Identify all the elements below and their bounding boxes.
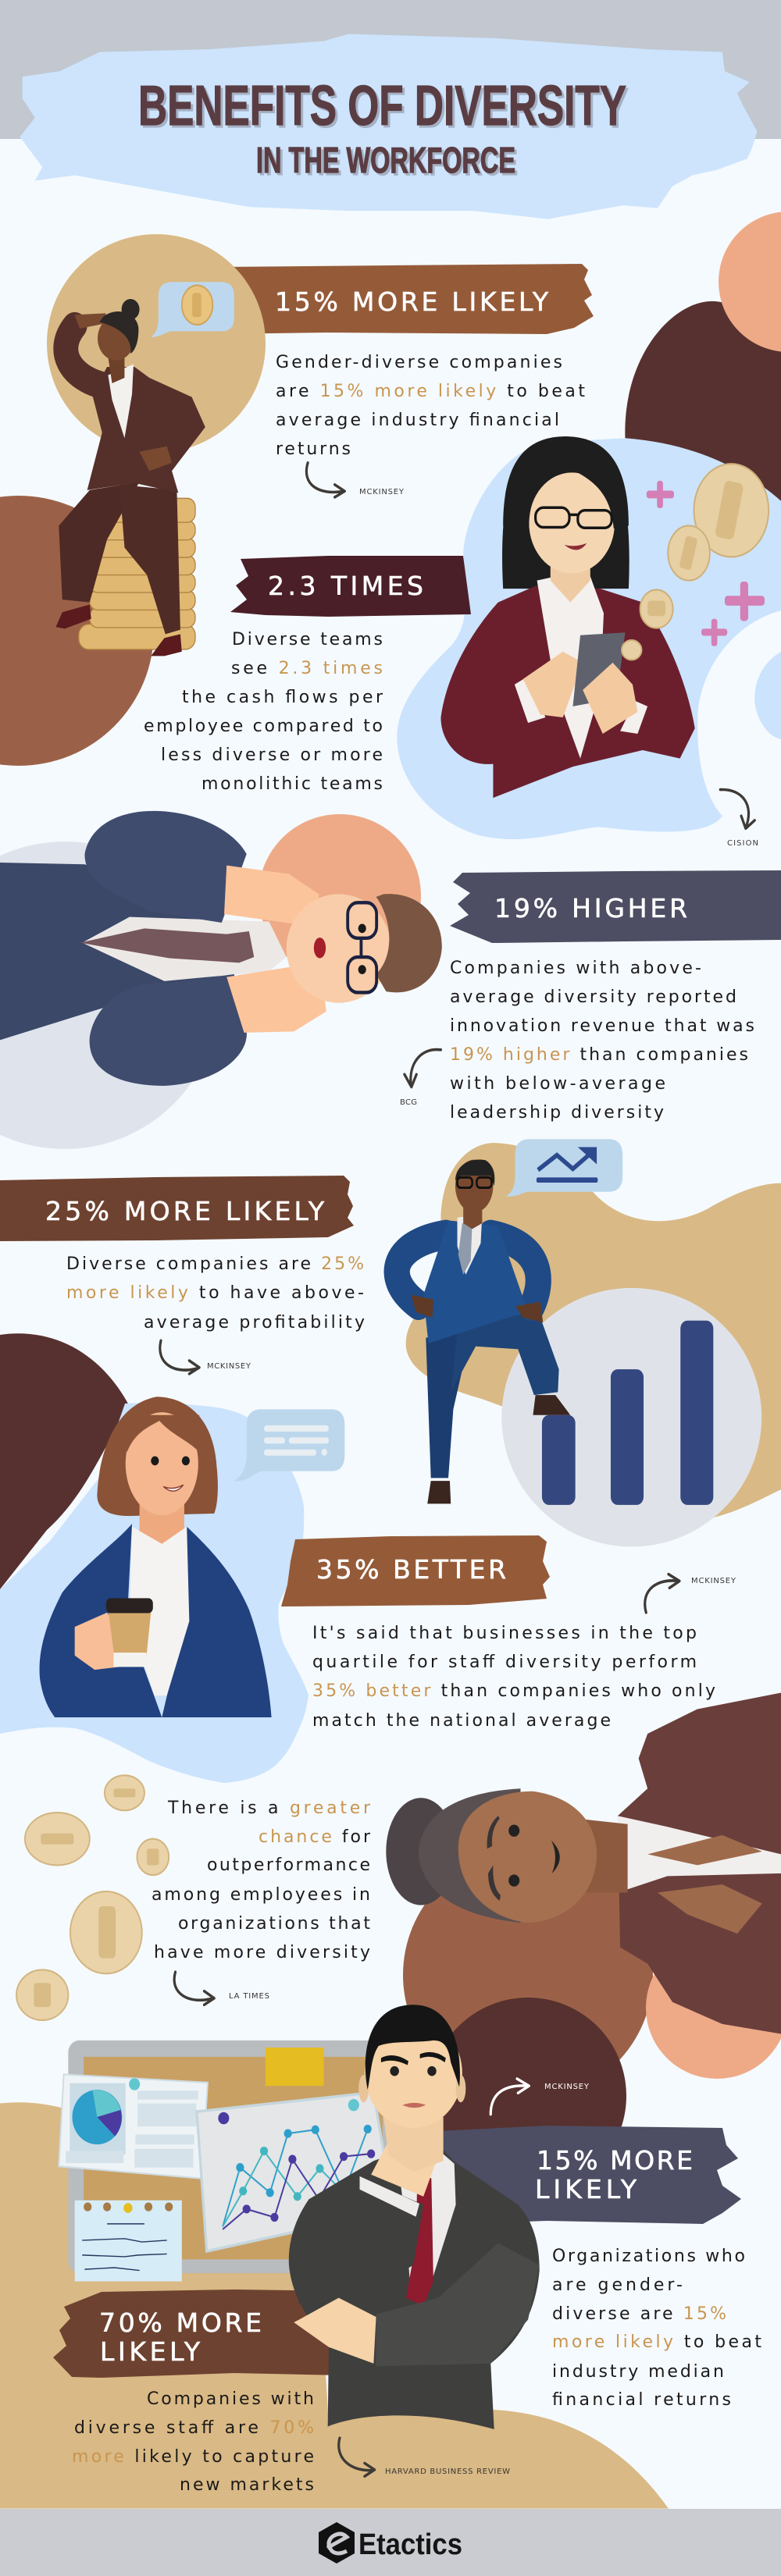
body text: 35% better: It's said that businesses in the top bbox=[312, 1624, 697, 1643]
body text: organizations who: are gender- bbox=[552, 2275, 683, 2295]
title banner bbox=[20, 34, 757, 219]
heading bar: 2.3 times bbox=[230, 556, 471, 617]
source: LA Times bbox=[174, 1972, 269, 2005]
body text: greater chance: organizations that bbox=[178, 1914, 370, 1934]
body text: greater chance: among employees in bbox=[152, 1885, 370, 1905]
body text: greater chance bbox=[152, 1799, 371, 1962]
body text: 70% more likely bbox=[72, 2389, 314, 2495]
source: McKinsey 2: MCKINSEY bbox=[207, 1362, 251, 1371]
source: McKinsey 3: MCKINSEY bbox=[691, 1577, 736, 1585]
source: McKinsey 4 bbox=[490, 2079, 590, 2115]
jacket bbox=[40, 1524, 272, 1717]
body text: 35% better: match the national average bbox=[312, 1711, 611, 1731]
hair bbox=[97, 1397, 218, 1516]
body text: 19% higher: innovation revenue that was bbox=[450, 1016, 754, 1036]
line chart card bbox=[129, 2078, 394, 2251]
hair bun bbox=[386, 1798, 456, 1905]
body text: 35% better bbox=[312, 1624, 715, 1731]
logo mark bbox=[319, 2522, 355, 2564]
body text: 15% more likely: are 15% more likely to beat bbox=[276, 382, 585, 401]
source arrow: Cision bbox=[720, 789, 754, 828]
hair bbox=[419, 1788, 521, 1923]
body text: 19% higher: Companies with above- bbox=[450, 959, 701, 978]
heading bar: 25% more likely: 25% MORE LIKELY bbox=[45, 1196, 325, 1226]
body text: greater chance: There is a greater bbox=[167, 1799, 371, 1818]
body text: 70% more likely: Companies with bbox=[147, 2389, 314, 2409]
trousers and shoes bbox=[55, 482, 182, 656]
body text: organizations who: diverse are 15% bbox=[552, 2304, 726, 2324]
body text: 70% more likely: new markets bbox=[180, 2475, 314, 2495]
source: McKinsey 1: MCKINSEY bbox=[359, 488, 405, 496]
body text: 15% more likely: Gender-diverse companies bbox=[276, 353, 562, 372]
frame bbox=[68, 2041, 390, 2273]
body text: 70% more likely: diverse staff are 70% bbox=[74, 2418, 314, 2438]
subtitle text: IN THE WORKFORCE bbox=[256, 140, 515, 180]
heading bar: 70% more likely bbox=[53, 2290, 344, 2378]
source: Cision: CISION bbox=[727, 839, 758, 848]
body text: organizations who: financial returns bbox=[552, 2390, 731, 2410]
heading bar: 70% more likely: LIKELY bbox=[100, 2336, 201, 2367]
source: McKinsey 1 bbox=[306, 463, 405, 497]
panel: left blobs behind woman bbox=[0, 1333, 308, 1783]
shirt bbox=[398, 2150, 456, 2298]
body text: organizations who bbox=[552, 2247, 761, 2410]
hair bbox=[502, 436, 629, 589]
body text: 19% higher: 19% higher than companies bbox=[450, 1045, 748, 1065]
body text: 2.3 times: less diverse or more bbox=[161, 745, 383, 765]
body text: 19% higher bbox=[450, 959, 754, 1123]
heading bar: 35% better: 35% BETTER bbox=[316, 1554, 506, 1585]
hands bbox=[647, 1835, 762, 1934]
illustration: woman lying sideways bbox=[386, 1692, 781, 2033]
body text: 25% more likely bbox=[66, 1254, 365, 1332]
body text: 25% more likely: average profitability bbox=[144, 1313, 365, 1332]
body text: 2.3 times bbox=[144, 630, 383, 794]
arms bbox=[397, 1235, 538, 1306]
source: Harvard Business Review: HARVARD BUSINESS REVIEW bbox=[385, 2467, 510, 2476]
jacket bbox=[618, 1692, 781, 2033]
footer bbox=[0, 2509, 781, 2576]
body text: 19% higher: average diversity reported bbox=[450, 987, 736, 1007]
coins bbox=[622, 464, 769, 660]
panel: right circles bbox=[403, 1850, 781, 2194]
body text: 15% more likely: returns bbox=[276, 439, 351, 459]
body text: greater chance: have more diversity bbox=[154, 1943, 370, 1962]
illustration: thinking man bbox=[289, 2005, 540, 2429]
body text: 25% more likely: more likely to have above- bbox=[66, 1283, 364, 1303]
illustration: woman with coffee cup bbox=[40, 1397, 344, 1717]
illustration: surprised man lying sideways bbox=[0, 811, 442, 1086]
body text: greater chance: chance for bbox=[259, 1827, 371, 1847]
grey circle bbox=[501, 1288, 761, 1546]
body text: 70% more likely: more likely to capture bbox=[72, 2447, 314, 2467]
heading bar: 19% higher bbox=[450, 870, 781, 943]
sleeves bbox=[84, 811, 247, 1086]
bar chart bbox=[542, 1321, 713, 1505]
coin stack bbox=[79, 498, 195, 649]
heading bar: 25% more likely bbox=[0, 1176, 354, 1241]
body text: organizations who: Organizations who bbox=[552, 2247, 745, 2266]
heading bar: 15% more likely (second): 15% MORE bbox=[537, 2145, 693, 2176]
crossed arm and hand bbox=[294, 2243, 540, 2366]
speech bubble with coin bbox=[151, 282, 234, 337]
tan circle behind woman bbox=[47, 234, 266, 453]
body text: 15% more likely bbox=[276, 353, 585, 459]
illustration: woman with phone and coins bbox=[440, 436, 769, 828]
panel: bottom tan shape bbox=[0, 2102, 669, 2509]
heading bar: 19% higher: 19% HIGHER bbox=[494, 893, 687, 923]
jacket bbox=[440, 586, 695, 798]
panel: growth chart background bbox=[406, 1143, 781, 1546]
speech bubble with chart bbox=[505, 1139, 622, 1197]
phone and hands bbox=[515, 632, 647, 734]
shirt bbox=[618, 1816, 781, 1892]
illustration: woman on coin stack bbox=[55, 282, 234, 656]
torso bbox=[423, 1220, 528, 1343]
body bbox=[289, 2144, 540, 2429]
illustration: man with foot on bar chart bbox=[397, 1139, 622, 1503]
body text: 35% better: 35% better than companies who only bbox=[312, 1681, 715, 1701]
heading bar: 70% more likely: 70% MORE bbox=[99, 2307, 262, 2338]
cork bbox=[84, 2057, 383, 2259]
source: McKinsey 3 bbox=[645, 1574, 736, 1613]
source: McKinsey 2 bbox=[160, 1340, 251, 1374]
brush background bbox=[20, 34, 757, 219]
source: BCG: BCG bbox=[400, 1098, 417, 1107]
plus signs bbox=[647, 481, 765, 646]
shirt bbox=[130, 1527, 189, 1695]
body text: 15% more likely: average industry financial bbox=[276, 411, 559, 430]
neck and face bbox=[124, 1412, 199, 1558]
source: BCG bbox=[400, 1050, 440, 1107]
body text: 2.3 times: the cash flows per bbox=[182, 688, 383, 707]
source: McKinsey 4: MCKINSEY bbox=[544, 2083, 590, 2091]
body text: 35% better: quartile for staff diversity perform bbox=[312, 1653, 697, 1672]
heading bar: 35% better bbox=[281, 1535, 550, 1606]
body text: 19% higher: leadership diversity bbox=[450, 1103, 664, 1123]
bulletin board illustration bbox=[59, 2041, 394, 2282]
legs bbox=[426, 1311, 570, 1503]
body text: 2.3 times: see 2.3 times bbox=[231, 659, 383, 678]
body text: 2.3 times: monolithic teams bbox=[201, 774, 383, 794]
tie bbox=[406, 2172, 433, 2306]
body text: 2.3 times: employee compared to bbox=[144, 717, 383, 736]
source: Harvard Business Review bbox=[339, 2438, 510, 2476]
jacket and arm bbox=[66, 313, 205, 493]
heading bar: 15% more likely (second) bbox=[437, 2126, 741, 2225]
hand and coffee cup bbox=[75, 1598, 153, 1670]
heading bar: 15% more likely (second): LIKELY bbox=[535, 2174, 637, 2204]
blouse bbox=[537, 570, 604, 759]
heading bar: 2.3 times: 2.3 TIMES bbox=[268, 571, 423, 601]
hands bbox=[224, 866, 326, 1033]
report card with pie chart bbox=[59, 2074, 208, 2179]
peach and grey circles behind man bbox=[0, 814, 421, 1149]
raised forearm and hand bbox=[294, 2115, 440, 2309]
body bbox=[0, 863, 229, 1040]
shirt and tie bbox=[458, 1215, 482, 1275]
heading bar: 15% more likely bbox=[219, 264, 594, 334]
face bbox=[503, 436, 629, 603]
neck bbox=[578, 1819, 628, 1892]
body text: 2.3 times: Diverse teams bbox=[232, 630, 383, 649]
coins: floating bbox=[16, 1775, 169, 2020]
logo text: Etactics bbox=[358, 2528, 462, 2561]
body text: 25% more likely: Diverse companies are 25% bbox=[66, 1254, 364, 1274]
heading bar: 15% more likely: 15% MORE LIKELY bbox=[275, 286, 549, 317]
sticky note bbox=[266, 2048, 324, 2086]
hands bbox=[411, 1295, 543, 1322]
body text: greater chance: outperformance bbox=[207, 1856, 370, 1875]
face bbox=[458, 1791, 597, 1923]
head bbox=[358, 2005, 465, 2172]
body text: organizations who: more likely to beat bbox=[552, 2332, 761, 2352]
grid note bbox=[75, 2201, 182, 2282]
shirt and tie bbox=[80, 917, 287, 981]
tan blob bbox=[406, 1143, 781, 1521]
source: LA Times: LA TIMES bbox=[229, 1992, 269, 2001]
panel: 15% more likely and 2.3 times background shapes bbox=[0, 212, 781, 839]
head bbox=[287, 894, 442, 1003]
head bbox=[98, 299, 140, 383]
body text: organizations who: industry median bbox=[552, 2362, 724, 2382]
body text: 19% higher: with below-average bbox=[450, 1074, 665, 1094]
speech bubble with text lines bbox=[234, 1409, 344, 1481]
head bbox=[455, 1159, 494, 1229]
